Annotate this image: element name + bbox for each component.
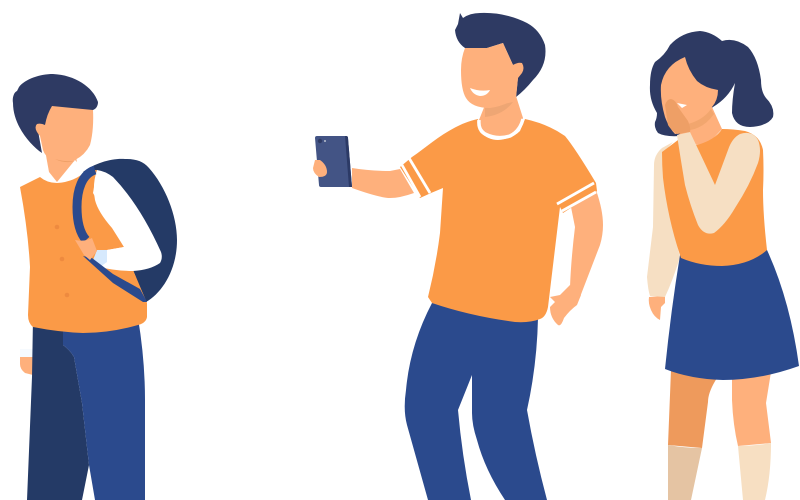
chin shadow: [55, 159, 75, 162]
t-shirt: [400, 119, 597, 322]
trousers: [405, 303, 547, 500]
collar: [40, 160, 84, 183]
raised arm: [352, 168, 414, 198]
figure: laughing girl: [647, 31, 799, 500]
right sock: [738, 443, 771, 500]
left sleeve stripes: [402, 158, 430, 197]
hair: [650, 31, 773, 136]
face: [461, 43, 524, 108]
phone: [315, 136, 352, 187]
blue trouser leg: [63, 318, 145, 500]
hair: [13, 74, 98, 153]
right arm: [570, 190, 603, 298]
shirt cuff: [93, 250, 107, 267]
vest: [20, 170, 147, 333]
hanging hand: [649, 296, 665, 320]
face: [36, 106, 93, 161]
hand over mouth: [665, 99, 690, 134]
face: [661, 57, 718, 134]
dark trouser leg: [27, 318, 89, 500]
gripping hand: [75, 238, 97, 260]
left sleeve: [647, 142, 680, 297]
white sleeve: [94, 170, 162, 271]
phone hand: [313, 160, 327, 177]
backpack strap: [77, 170, 147, 302]
figure: man with phone: [313, 13, 603, 500]
vest buttons: [55, 225, 69, 297]
mouth: [677, 103, 687, 108]
left hand: [20, 349, 33, 375]
left sock: [668, 445, 702, 500]
right sleeve stripes: [557, 183, 596, 211]
right hand: [550, 285, 581, 325]
neck: [45, 150, 78, 182]
right leg: [732, 372, 771, 446]
neck: [678, 107, 722, 145]
neck shadow: [688, 109, 714, 130]
figure: boy with backpack: [13, 74, 177, 500]
backpack: [83, 159, 177, 302]
raised forearm sleeve: [677, 132, 760, 234]
neck: [479, 96, 523, 138]
smile: [470, 88, 490, 96]
collar: [479, 119, 523, 138]
skirt: [665, 250, 799, 380]
left leg: [668, 370, 717, 448]
hair: [455, 13, 546, 97]
neck shadow: [485, 102, 513, 117]
vest: [662, 129, 767, 266]
